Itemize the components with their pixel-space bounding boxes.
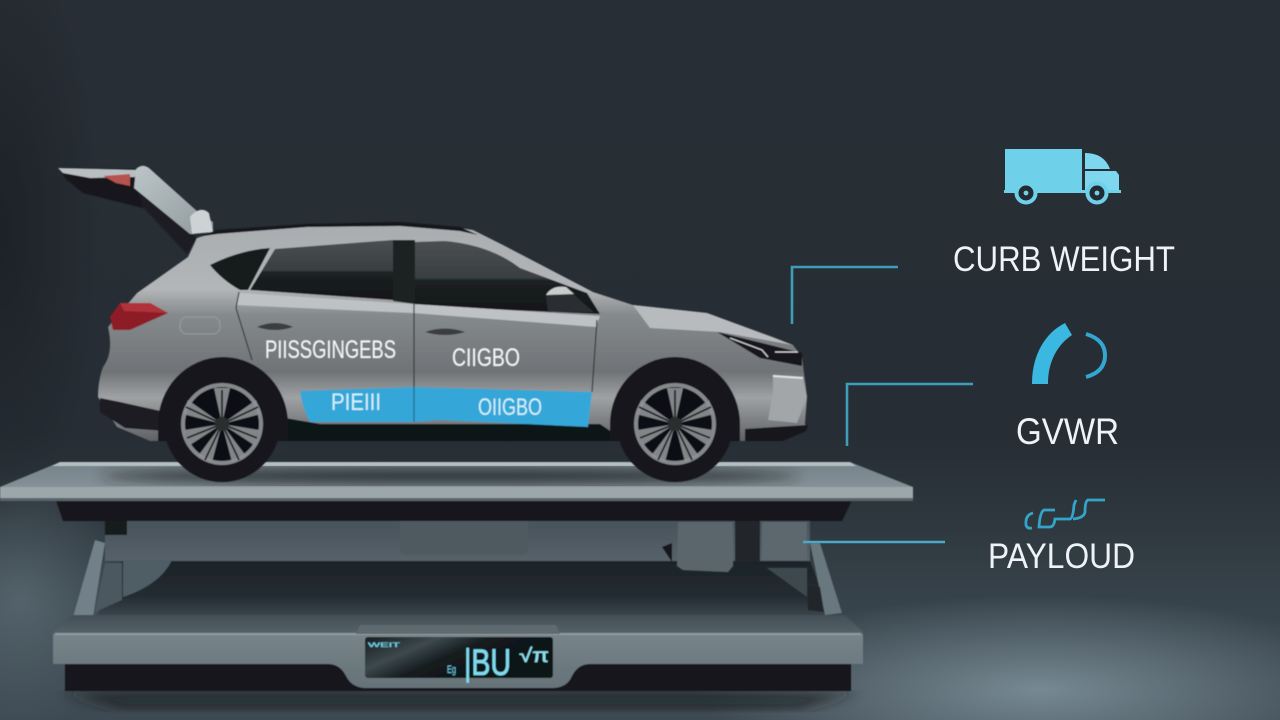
front wheel <box>617 366 733 482</box>
heading: payload: PAYLOUD <box>988 537 1135 576</box>
icon: truck <box>1004 149 1121 202</box>
roof rail <box>197 222 478 237</box>
car body <box>98 224 807 441</box>
scale platform <box>0 462 913 521</box>
front window <box>415 241 600 314</box>
middle window <box>250 240 393 300</box>
label: passengers: PIISSGINGEBS <box>265 336 396 364</box>
open tailgate <box>58 166 213 254</box>
callout line: gvwr <box>847 384 973 446</box>
rear wheel <box>164 366 280 482</box>
door lines <box>236 292 597 392</box>
lower body sill <box>280 418 625 441</box>
heading: gvwr: GVWR <box>1016 411 1119 452</box>
tailgate strut <box>134 166 213 234</box>
callout line: curb weight <box>792 267 898 324</box>
side mirror <box>546 287 594 312</box>
door handles <box>257 323 465 335</box>
scale digital display <box>365 637 553 683</box>
scale digital display: |BU <box>464 642 511 683</box>
taillight <box>110 303 168 330</box>
scale base <box>53 615 863 710</box>
blue stripe panel <box>300 387 592 427</box>
icon: payload squiggle <box>1026 500 1105 528</box>
scale digital display: √π <box>519 646 549 667</box>
stripe divider <box>413 387 415 422</box>
icon: gauge arcs <box>1032 323 1105 384</box>
beltline highlight <box>236 293 600 327</box>
callout line: payload <box>803 541 945 543</box>
car <box>58 166 808 482</box>
front wheel arch <box>610 357 740 441</box>
scale digital display: Eg <box>447 664 456 676</box>
fuel flap <box>180 317 220 334</box>
heading: curb weight: CURB WEIGHT <box>953 240 1175 279</box>
label: blue stripe left: PIEIII <box>331 389 381 416</box>
headlight <box>717 332 802 366</box>
rear wheel arch <box>158 357 288 441</box>
hood highlight <box>633 305 793 345</box>
weighing scale <box>0 462 913 710</box>
label: blue stripe right: OIIGBO <box>478 394 542 421</box>
scale understructure <box>73 518 842 618</box>
label: cargo: CIIGBO <box>452 344 520 372</box>
scale digital display: WEIT <box>368 643 401 649</box>
contact shadow under car <box>100 468 800 484</box>
front grille <box>768 375 807 423</box>
rear quarter window <box>210 248 270 290</box>
door pillar <box>393 240 415 304</box>
